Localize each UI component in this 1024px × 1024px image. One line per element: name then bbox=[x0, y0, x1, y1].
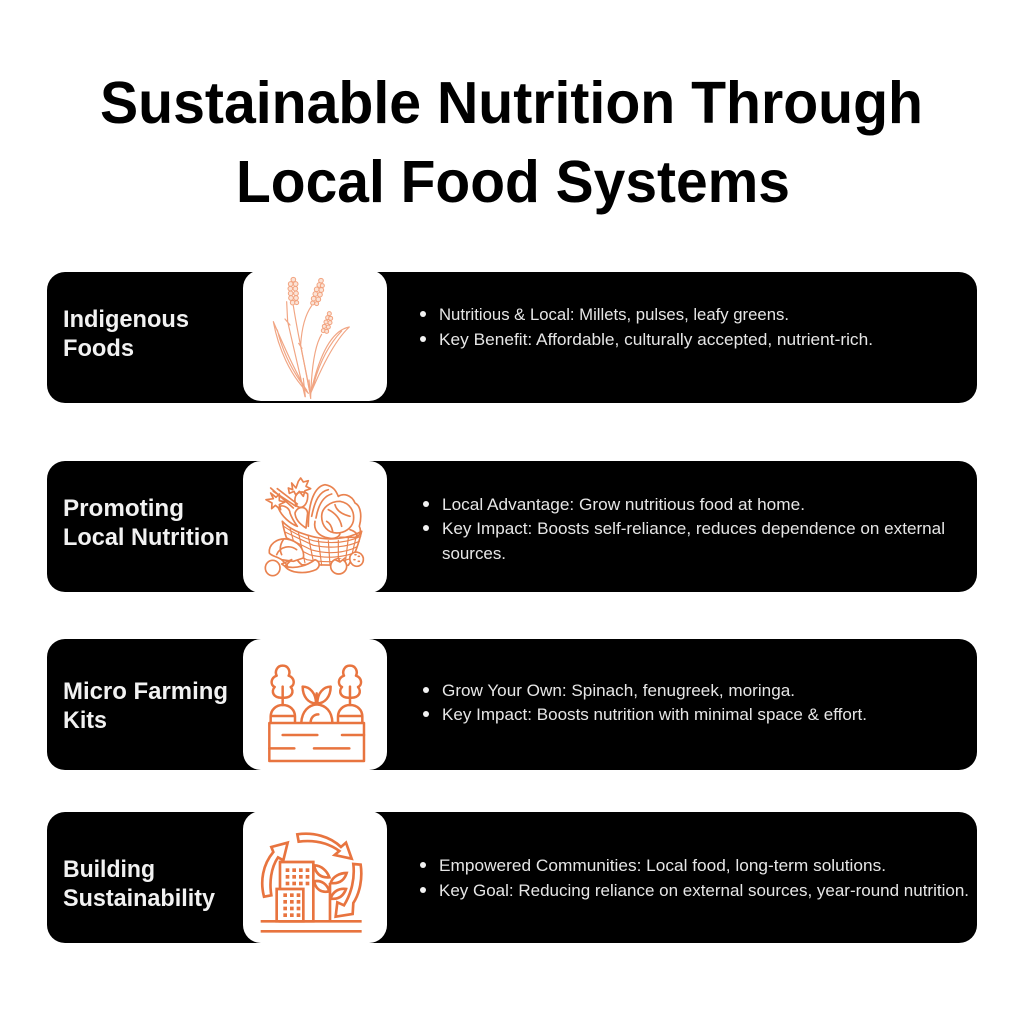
millet heads bbox=[288, 277, 333, 333]
heading: promoting local nutrition: Local Nutrition bbox=[63, 524, 229, 551]
icon tile bbox=[243, 811, 387, 943]
heading: indigenous foods bbox=[63, 306, 189, 362]
bullet list: Key Impact: Boosts self-reliance, reduces dependence on external bbox=[442, 520, 945, 538]
bullet list bbox=[423, 496, 945, 563]
heading: micro farming kits bbox=[63, 678, 228, 734]
foreground vegetables bbox=[265, 539, 363, 576]
heading: promoting local nutrition bbox=[63, 495, 229, 551]
icon tile bbox=[243, 639, 387, 770]
panel background bbox=[47, 461, 977, 592]
icon: raised garden bed bbox=[269, 666, 364, 761]
bullet list: Key Goal: Reducing reliance on external sources, year-round nutrition. bbox=[439, 882, 969, 900]
icon: green city cycle bbox=[261, 834, 362, 931]
bullet list bbox=[423, 682, 867, 724]
heading: micro farming kits: Micro Farming bbox=[63, 678, 228, 705]
plant bbox=[314, 865, 347, 921]
windows bbox=[283, 868, 309, 917]
bullet list: Grow Your Own: Spinach, fenugreek, moringa. bbox=[442, 682, 795, 700]
heading: promoting local nutrition: Promoting bbox=[63, 495, 184, 522]
bullet list: Local Advantage: Grow nutritious food at home. bbox=[442, 496, 805, 514]
panel background bbox=[47, 639, 977, 770]
panel: building sustainability bbox=[47, 811, 977, 943]
leafy cabbage bbox=[308, 485, 361, 538]
bullet list bbox=[420, 306, 873, 349]
woven basket bbox=[282, 521, 362, 565]
panel: indigenous foods bbox=[47, 270, 977, 403]
icon: millet plant bbox=[273, 277, 349, 398]
bullet list: sources. bbox=[442, 545, 506, 563]
bullet list: Nutritious & Local: Millets, pulses, leafy greens. bbox=[439, 306, 789, 324]
heading: indigenous foods: Indigenous bbox=[63, 306, 189, 333]
icon tile bbox=[243, 461, 387, 593]
carrots and greens bbox=[266, 478, 311, 528]
panel background bbox=[47, 812, 977, 943]
title: Local Food Systems bbox=[236, 149, 790, 215]
cycle arrows bbox=[297, 834, 352, 859]
heading: building sustainability: Sustainability bbox=[63, 885, 216, 912]
bullet list: Empowered Communities: Local food, long-term solutions. bbox=[439, 857, 886, 875]
title bbox=[100, 70, 923, 215]
heading: building sustainability bbox=[63, 856, 216, 912]
heading: micro farming kits: Kits bbox=[63, 707, 107, 734]
bullet list: Key Benefit: Affordable, culturally accepted, nutrient-rich. bbox=[439, 331, 873, 349]
icon: vegetable basket bbox=[265, 478, 363, 576]
icon tile bbox=[243, 270, 387, 401]
bullet list: Key Impact: Boosts nutrition with minimal space & effort. bbox=[442, 706, 867, 724]
panel background bbox=[47, 272, 977, 403]
heading: building sustainability: Building bbox=[63, 856, 155, 883]
buildings bbox=[280, 862, 313, 921]
bullet list bbox=[420, 857, 969, 900]
heading: indigenous foods: Foods bbox=[63, 335, 134, 362]
title: Sustainable Nutrition Through bbox=[100, 70, 923, 136]
panel: micro farming kits bbox=[47, 639, 977, 770]
panel: promoting local nutrition bbox=[47, 461, 977, 593]
